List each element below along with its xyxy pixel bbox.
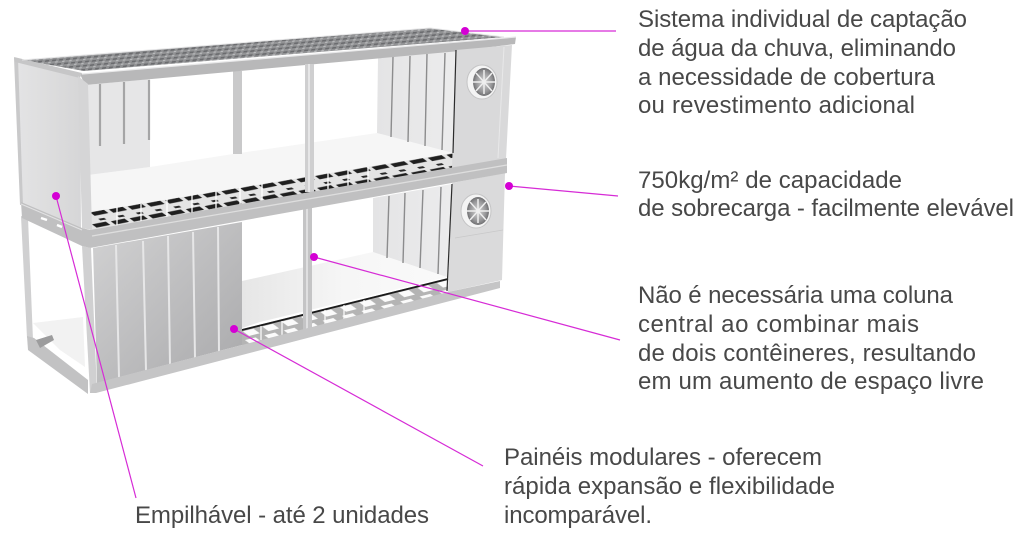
upper left wall panels — [85, 79, 150, 175]
text: load capacity — [638, 167, 1014, 222]
text: central column — [638, 282, 984, 395]
text: rainwater system: a necessidade de cobertura — [638, 64, 936, 91]
lower right service unit with fan — [447, 173, 505, 292]
lower left open frame — [21, 216, 88, 394]
callout: rainwater line — [461, 27, 616, 35]
text: central column: de dois contêineres, resultando — [638, 340, 976, 367]
text: load capacity: 750kg/m² de capacidade — [638, 167, 902, 194]
lower floor — [242, 252, 447, 328]
lower grating — [242, 278, 448, 346]
text: rainwater system: Sistema individual de captação — [638, 6, 967, 33]
text: rainwater system: de água da chuva, eliminando — [638, 35, 956, 62]
callout: central column line — [310, 253, 620, 340]
callout lines and markers — [52, 27, 620, 498]
top front beam — [14, 28, 516, 85]
text: modular panels: incomparável. — [504, 502, 652, 529]
centre posts — [303, 64, 314, 330]
upper rear post — [233, 71, 242, 154]
text: stackable: Empilhável - até 2 unidades — [135, 502, 429, 529]
upper right service unit with fan — [452, 45, 512, 168]
upper floor — [88, 133, 453, 212]
front corner post — [78, 76, 97, 393]
roof grating — [22, 28, 504, 71]
text: rainwater system — [638, 6, 967, 119]
text: load capacity: de sobrecarga - facilmente elevável — [638, 195, 1014, 222]
upper grating — [90, 153, 455, 231]
text: central column: central ao combinar mais — [638, 311, 919, 338]
bottom rail — [90, 281, 500, 393]
text: modular panels — [504, 444, 835, 529]
text: central column: Não é necessária uma coluna — [638, 282, 954, 309]
left side panel — [14, 58, 81, 230]
callout: stackable line — [52, 192, 136, 498]
upper right wall panels — [377, 51, 456, 153]
lower right wall panels — [373, 184, 452, 277]
middle beam — [21, 158, 507, 248]
callout: load capacity line — [505, 182, 618, 196]
text: modular panels: rápida expansão e flexibilidade — [504, 473, 835, 500]
container illustration — [14, 28, 516, 394]
text: rainwater system: ou revestimento adicional — [638, 92, 915, 119]
text: central column: em um aumento de espaço livre — [638, 368, 984, 395]
text: modular panels: Painéis modulares - oferecem — [504, 444, 822, 471]
large front panel — [93, 222, 242, 383]
callout: modular panels line — [230, 325, 483, 466]
